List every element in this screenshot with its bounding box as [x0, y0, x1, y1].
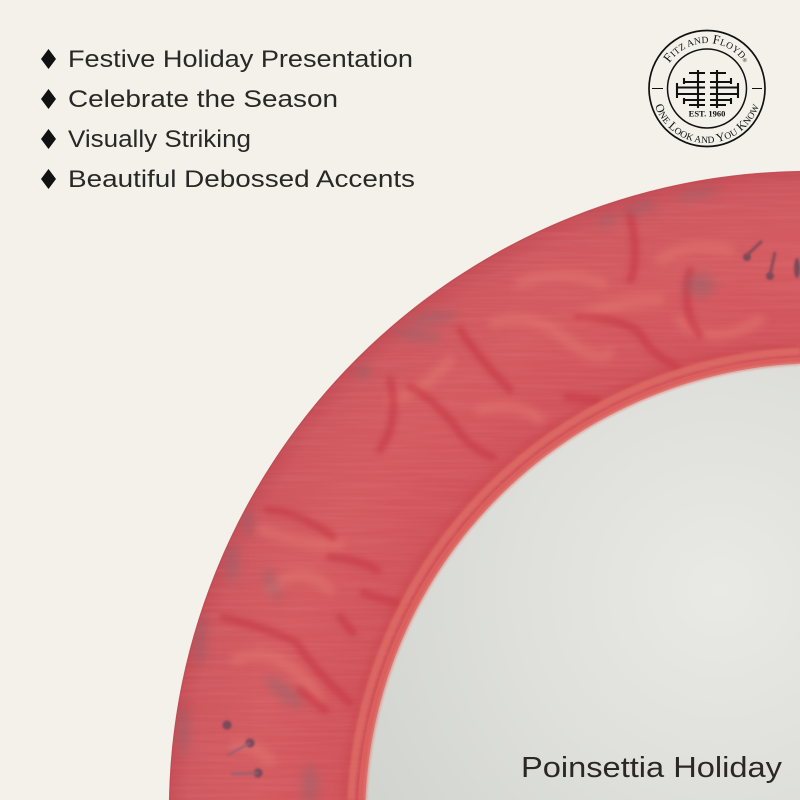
logo: Fitz and Floyd seal: FITZ AND FLOYD® — [662, 34, 747, 63]
bullet 3: Visually Striking — [68, 126, 251, 153]
bullet 1: Festive Holiday Presentation — [68, 46, 413, 73]
debossed leaf: dark creases — [223, 215, 700, 710]
logo: Fitz and Floyd seal: ONE LOOK AND YOU KNOW — [656, 104, 758, 144]
bullet 2: Celebrate the Season — [68, 86, 338, 113]
debossed leaf: light ridges — [235, 247, 760, 760]
inner rim ridge — [344, 344, 800, 800]
plate rim band — [160, 160, 800, 800]
inner edge glow — [365, 364, 800, 800]
bullet 4: Beautiful Debossed Accents — [68, 166, 415, 193]
feature list — [41, 46, 415, 193]
plate — [160, 160, 800, 800]
plate white centre — [365, 364, 800, 800]
logo: Fitz and Floyd seal — [648, 30, 766, 148]
plate outer edge — [170, 172, 800, 800]
grey glaze patches — [177, 185, 720, 800]
product name caption: Poinsettia Holiday — [521, 752, 783, 784]
pierced holes — [222, 241, 800, 778]
logo: Fitz and Floyd seal: EST. 1960 — [689, 108, 725, 118]
